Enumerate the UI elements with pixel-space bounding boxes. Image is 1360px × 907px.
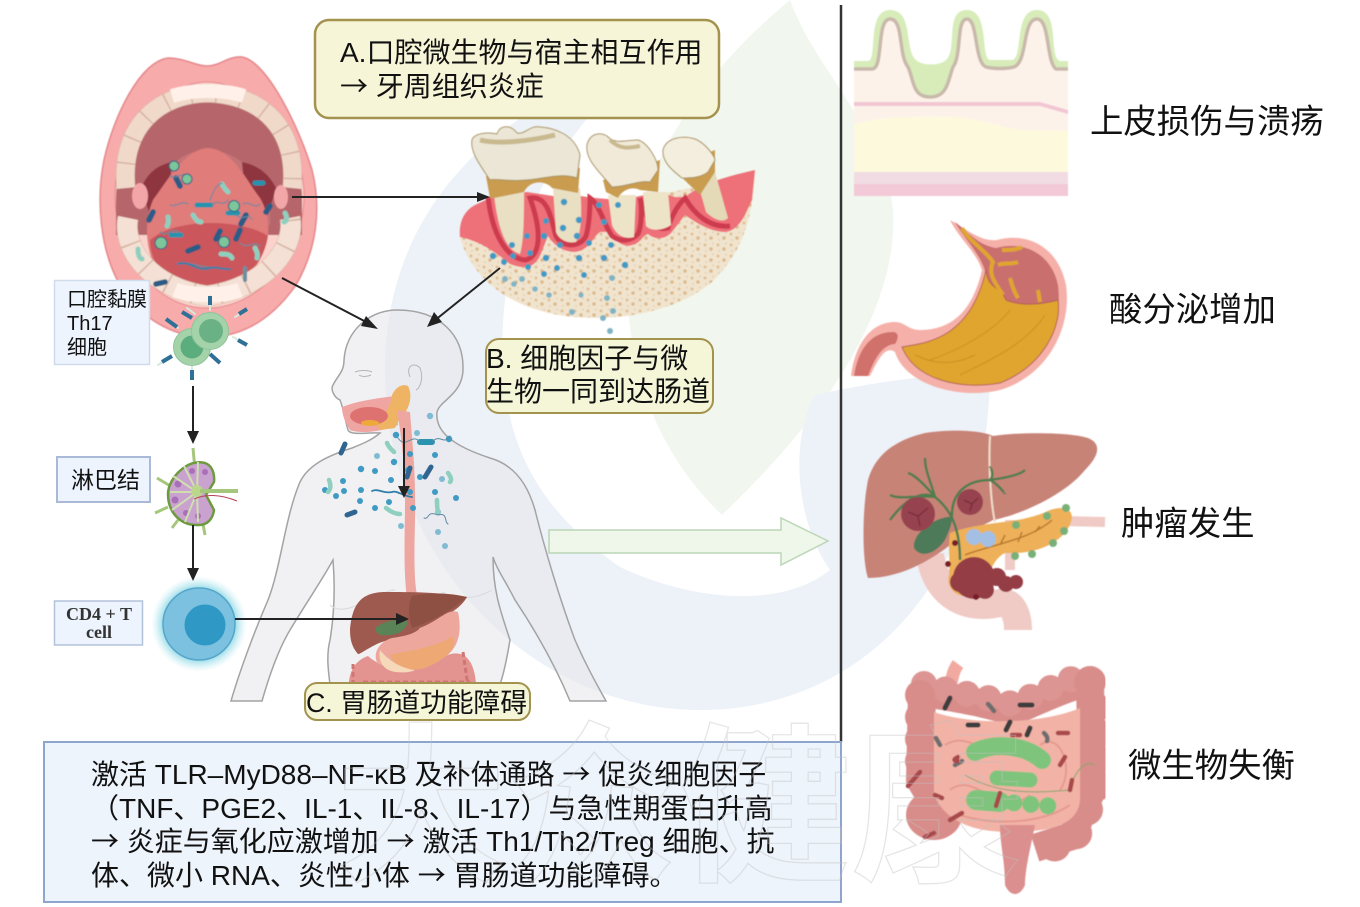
- label: epithelial damage: 上皮损伤与溃疡: [1090, 104, 1324, 141]
- icon: intestines with dysbiosis: [906, 664, 1096, 894]
- bacteria dots: [490, 199, 628, 278]
- arrow: Th17 to lymph node: [187, 386, 199, 444]
- label: lymph node: 淋巴结: [71, 467, 140, 493]
- liver: [350, 592, 467, 654]
- icon: lymph node: [155, 448, 238, 535]
- stomach stub: [950, 664, 958, 700]
- text block: mechanism summary: 激活 TLR–MyD88–NF-κB 及补体通路 → 促炎细胞因子: [91, 753, 766, 793]
- basement membrane: [854, 19, 1068, 97]
- label: CD4 T cell: cell: [86, 622, 112, 642]
- watermark: text: 大众健康: [335, 713, 1023, 905]
- arrow: teeth to body: [427, 268, 500, 327]
- panel divider: [840, 5, 842, 742]
- icon: liver, pancreas and tumours: [864, 431, 1105, 630]
- panel: periodontal tissue illustration: [459, 127, 755, 334]
- label: oral mucosa Th17 cells: Th17: [67, 313, 113, 335]
- duodenum: [930, 555, 1018, 630]
- panel: Th17 cells: [158, 296, 247, 380]
- callout B: 生物一同到达肠道: [486, 376, 710, 407]
- callout A: [315, 20, 719, 118]
- green epithelium: [854, 10, 1068, 110]
- label: oral mucosa Th17 cells: 细胞: [67, 336, 107, 359]
- intestines: [348, 653, 476, 700]
- callout C: C. 胃肠道功能障碍: [306, 688, 527, 718]
- palate: [116, 88, 302, 235]
- rectum: [1000, 825, 1035, 894]
- upper teeth: [125, 93, 293, 188]
- callout B: [486, 339, 713, 413]
- text block: mechanism summary: → 炎症与氧化应激增加 → 激活 Th1/Th2/Treg 细胞、抗: [91, 820, 775, 860]
- panel: mouth illustration: [100, 57, 317, 337]
- bacteria cluster: [322, 413, 459, 549]
- bacteria and cells in mouth: [138, 175, 287, 284]
- arrow: lymph node to CD4 T cell: [187, 525, 199, 581]
- icon: intestinal epithelium cross-section: [854, 10, 1068, 196]
- gum sockets: [488, 197, 730, 260]
- icon: stomach: [851, 220, 1067, 393]
- oral cavity and salivary glands: [342, 396, 398, 432]
- lips: [100, 57, 317, 337]
- bile ducts: [890, 458, 1025, 560]
- plaque: [486, 168, 580, 198]
- esophagus: [397, 410, 418, 598]
- green bacteria: [975, 746, 1050, 806]
- text block: mechanism summary: （TNF、PGE2、IL-1、IL-8、IL-17）与急性期蛋白升高: [91, 793, 772, 824]
- panel: human body illustration: [231, 310, 606, 701]
- callout A: A.口腔微生物与宿主相互作用: [340, 37, 702, 68]
- pancreatic tumour: [950, 557, 1023, 599]
- label: lymph node: [57, 457, 150, 502]
- label: acid secretion: 酸分泌增加: [1109, 292, 1276, 329]
- pancreas: [390, 636, 454, 669]
- body silhouette: [231, 310, 606, 701]
- small intestine: [934, 708, 1080, 832]
- gum tissue: [460, 170, 755, 267]
- lamina propria: [854, 20, 1068, 110]
- arrow: left to right panel: [549, 518, 828, 565]
- other bacteria: [908, 698, 1072, 837]
- jawbone: [459, 175, 755, 318]
- watermark: leaf logo: [385, 0, 990, 710]
- callout B: B. 细胞因子与微: [486, 343, 688, 374]
- gallbladder: [375, 620, 408, 635]
- tissue layers: [854, 108, 1068, 172]
- label: tumorigenesis: 肿瘤发生: [1121, 506, 1255, 543]
- tooth roots: [493, 185, 524, 254]
- text block: mechanism summary: 体、微小 RNA、炎性小体 → 胃肠道功能障碍。: [91, 854, 677, 894]
- tongue: [147, 148, 268, 290]
- label: CD4 T cell: CD4 + T: [66, 604, 132, 624]
- arrow: CD4 T cell to gut: [235, 613, 409, 625]
- pancreas: [948, 508, 1072, 596]
- haustra: [924, 672, 1090, 704]
- gallbladder: [914, 517, 952, 554]
- label: oral mucosa Th17 cells: [54, 280, 150, 364]
- tonsils: [132, 183, 148, 209]
- arrow: mouth to teeth: [292, 192, 490, 202]
- crowns: [472, 127, 580, 181]
- colon: [922, 682, 1092, 848]
- icon: CD4 T cell: [151, 576, 247, 672]
- callout A: → 牙周组织炎症: [340, 65, 544, 105]
- liver tumours: [901, 489, 983, 531]
- label: CD4 T cell: [54, 601, 142, 645]
- text block: mechanism summary: [44, 742, 841, 902]
- bile duct cells: [966, 529, 996, 547]
- label: oral mucosa Th17 cells: 口腔黏膜: [67, 288, 147, 311]
- arrow: mouth to esophagus: [398, 428, 410, 498]
- label: dysbiosis: 微生物失衡: [1128, 748, 1295, 785]
- lower teeth: [127, 218, 291, 296]
- liver: [864, 431, 1097, 578]
- arrow: mouth to body: [282, 278, 378, 329]
- stomach: [376, 611, 460, 667]
